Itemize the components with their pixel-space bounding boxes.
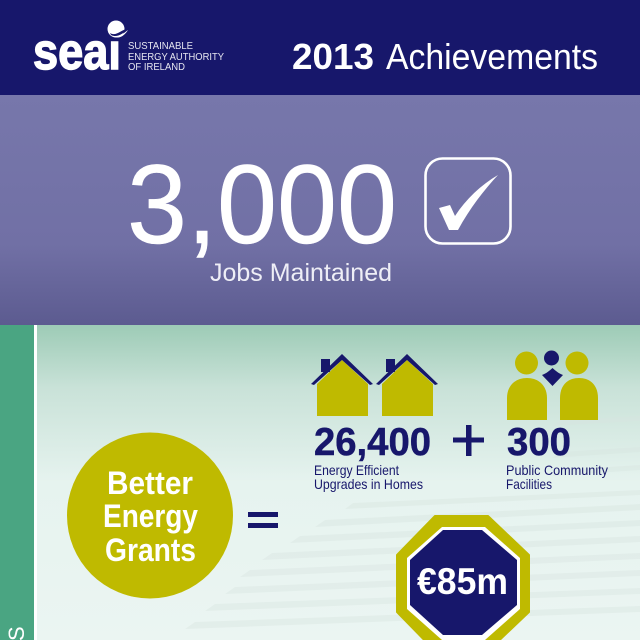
house right xyxy=(376,354,438,416)
header band xyxy=(0,0,640,95)
grants circle text xyxy=(103,465,198,568)
logo wordmark: seai xyxy=(33,23,121,80)
grants circle text: Grants xyxy=(105,532,196,568)
homes caption: Energy Efficient xyxy=(314,462,399,478)
equals sign xyxy=(248,512,278,528)
logo: SEAI xyxy=(33,20,224,80)
plus sign xyxy=(453,425,484,456)
logo tagline xyxy=(128,40,224,73)
facilities caption: Public Community xyxy=(506,462,608,478)
facilities number: 300 xyxy=(507,421,571,464)
octagon badge xyxy=(397,516,529,640)
icon: checkbox tick xyxy=(426,158,510,244)
background stripes xyxy=(185,416,640,629)
homes number: 26,400 xyxy=(314,421,431,464)
facilities caption: Facilities xyxy=(506,476,552,492)
grants circle xyxy=(67,432,233,598)
title: Achievements xyxy=(386,36,598,77)
panel: jobs maintained xyxy=(0,95,640,325)
homes caption xyxy=(314,462,423,492)
facilities caption xyxy=(506,462,608,492)
logo tagline: SUSTAINABLE xyxy=(128,40,193,52)
panel: better energy grants xyxy=(0,325,640,640)
logo droplet swoosh xyxy=(106,20,129,40)
side stripe xyxy=(0,325,37,640)
title: 2013 xyxy=(292,36,374,77)
logo tagline: ENERGY AUTHORITY xyxy=(128,51,224,63)
icon: two houses xyxy=(311,354,438,416)
grants circle text: Energy xyxy=(103,498,198,534)
grants circle text: Better xyxy=(107,465,193,501)
title xyxy=(292,36,598,77)
house left xyxy=(311,354,373,416)
jobs caption: Jobs Maintained xyxy=(210,259,392,287)
homes caption: Upgrades in Homes xyxy=(314,476,423,492)
logo tagline: OF IRELAND xyxy=(128,61,185,73)
jobs number: 3,000 xyxy=(127,142,397,267)
icon: community people xyxy=(507,350,598,420)
funding amount: €85m xyxy=(417,561,508,602)
